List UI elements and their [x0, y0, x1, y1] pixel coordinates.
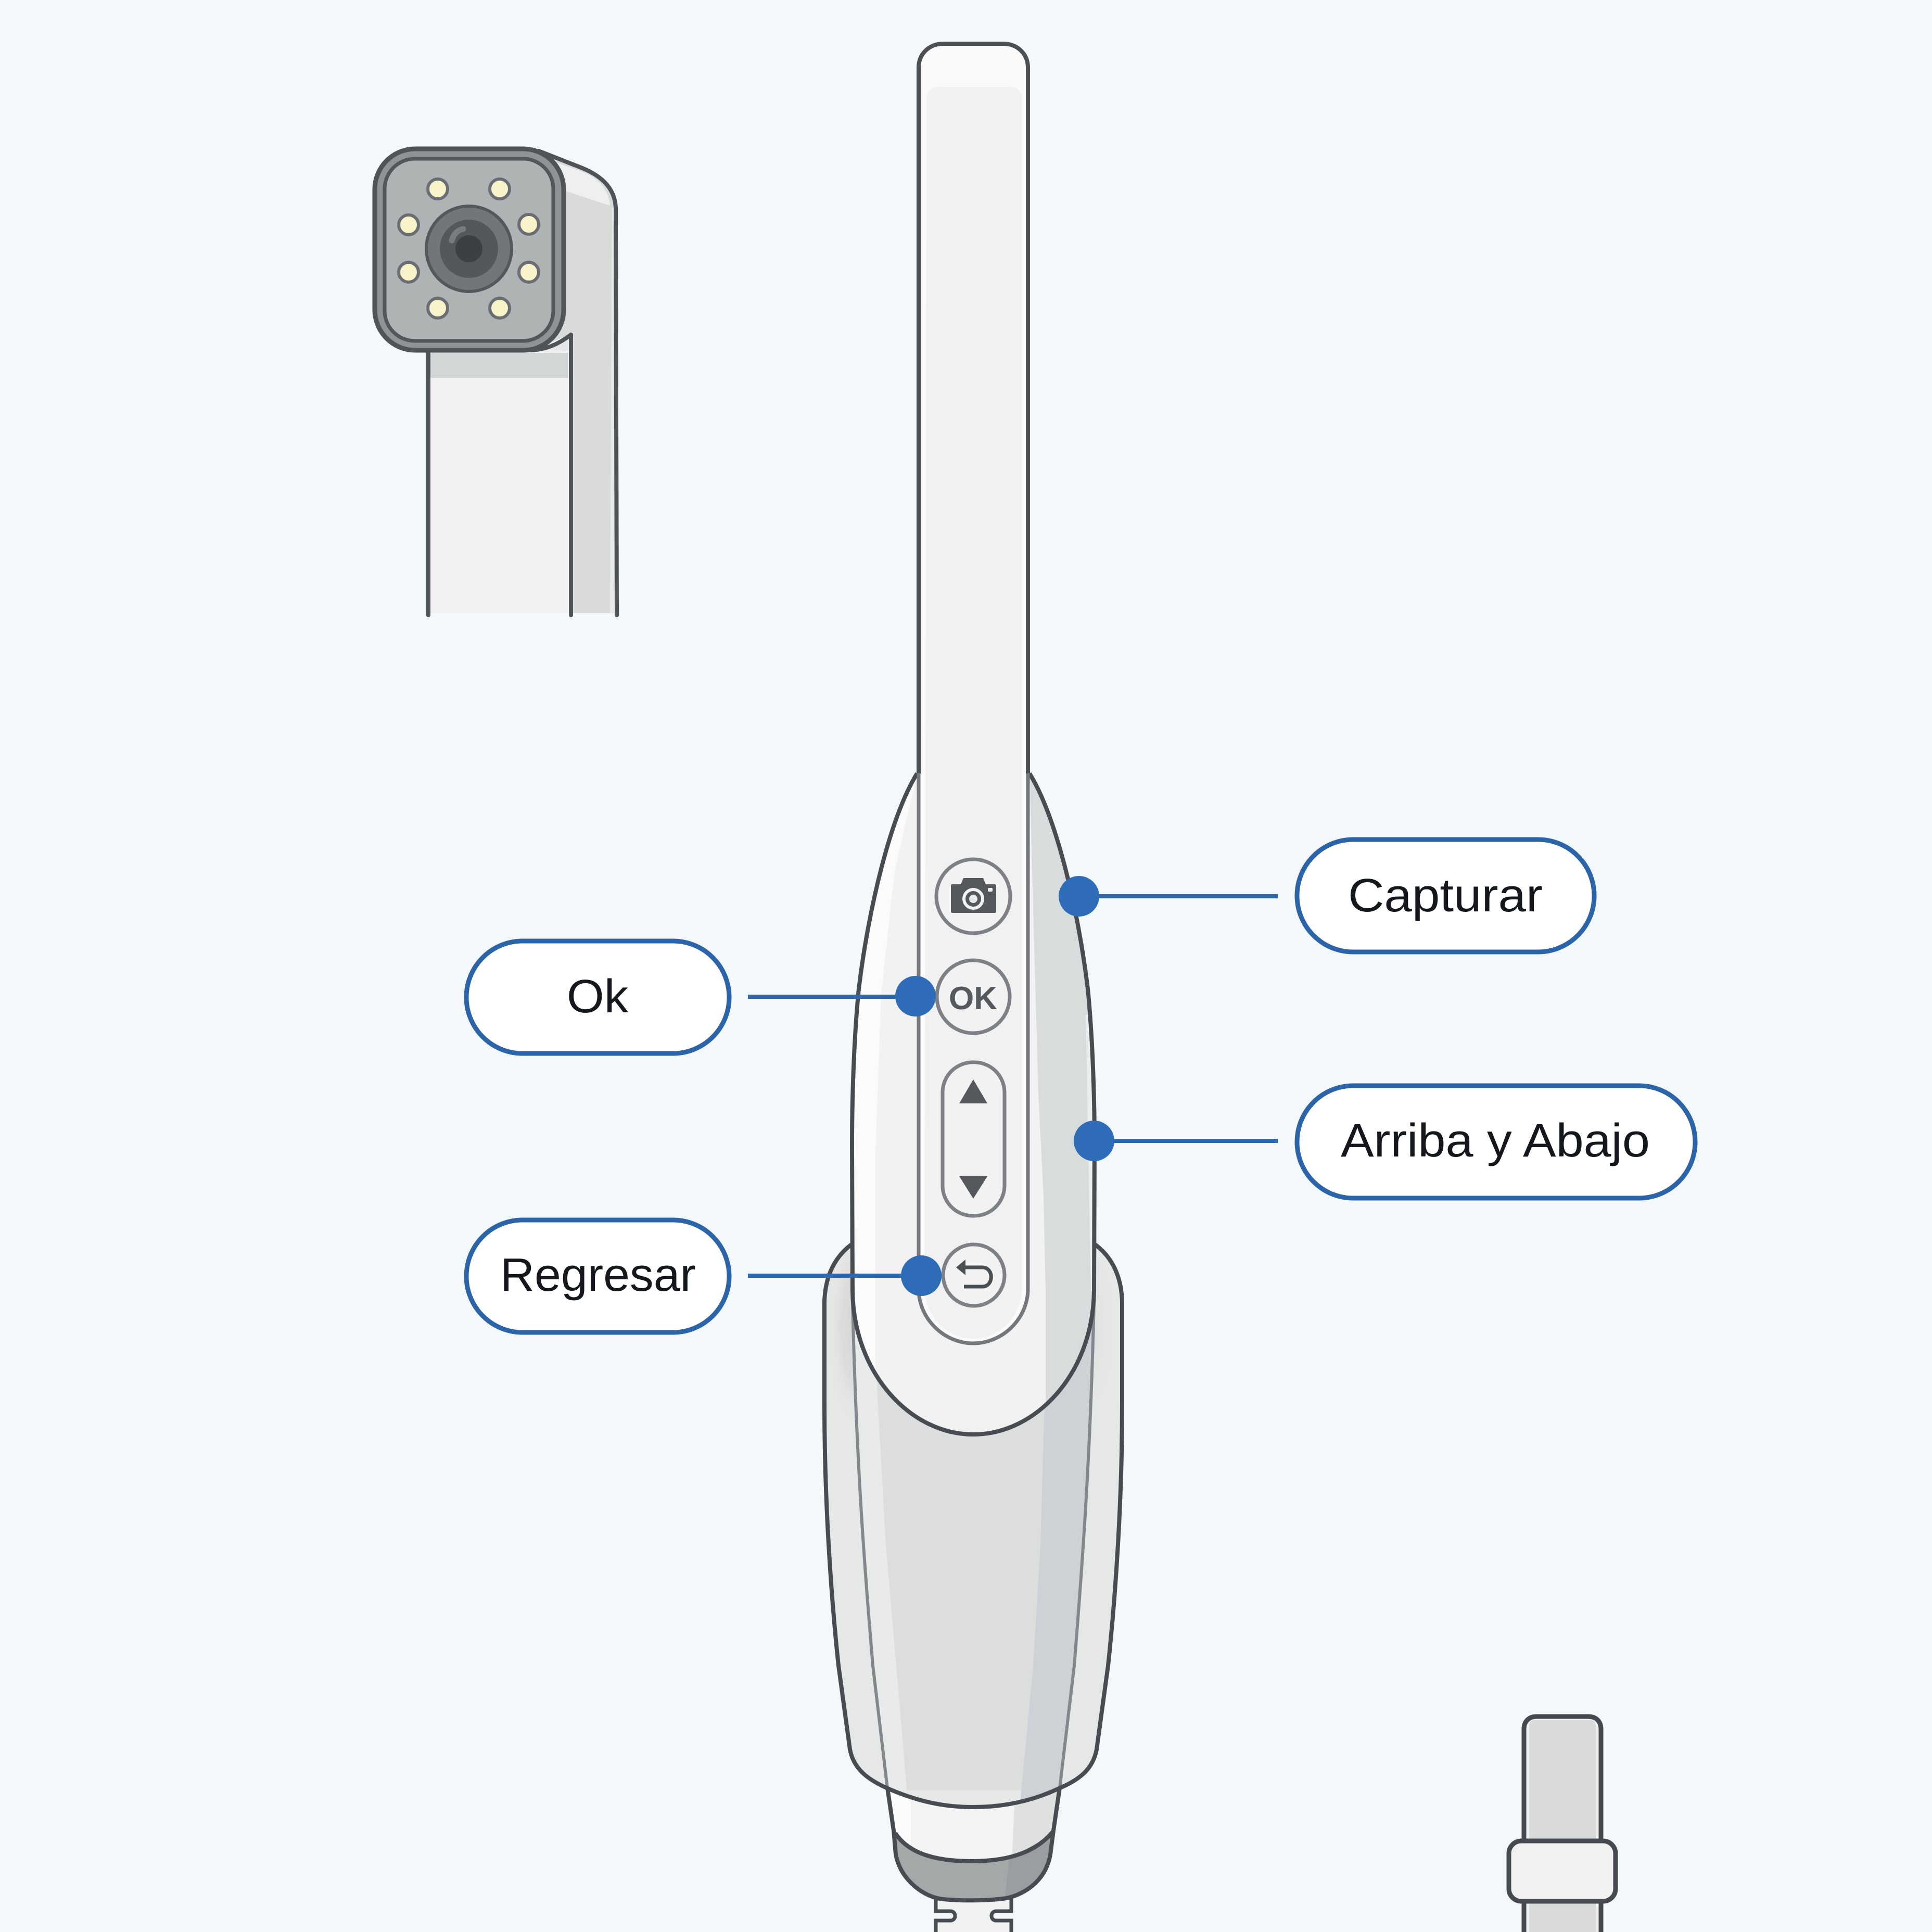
icon: back arrow	[956, 1260, 991, 1287]
callout: Ok	[466, 941, 936, 1053]
camera housing	[375, 149, 564, 350]
button: up and down	[943, 1062, 1005, 1216]
marker dot: Arriba y Abajo	[1074, 1121, 1114, 1161]
lower handle	[824, 1228, 1122, 1807]
marker dot: Regresar	[901, 1255, 942, 1296]
button: ok: OK	[949, 981, 997, 1016]
label pill: Regresar	[466, 1220, 729, 1332]
label pill: Capturar: Capturar	[1348, 870, 1543, 922]
label pill: Ok: Ok	[567, 971, 629, 1023]
camera face plate	[385, 159, 553, 341]
LED ring	[399, 179, 539, 318]
leader line: Arriba y Abajo	[1094, 1139, 1278, 1143]
neck and collar	[885, 1785, 1062, 1910]
lens	[426, 206, 512, 291]
camera arm side face	[531, 151, 617, 615]
icon: up arrow	[959, 1079, 987, 1103]
button: capture	[936, 859, 1010, 933]
cable connector	[936, 1895, 1011, 1932]
label pill: Arriba y Abajo	[1297, 1086, 1695, 1198]
cable body	[1524, 1717, 1601, 1932]
cable collar	[1509, 1841, 1616, 1901]
probe wand and control panel	[919, 44, 1028, 1343]
label pill: Regresar: Regresar	[500, 1249, 696, 1301]
label pill: Capturar	[1297, 840, 1594, 952]
callout: Capturar	[1059, 840, 1594, 952]
callout: Arriba y Abajo	[1074, 1086, 1695, 1198]
leader line: Regresar	[748, 1274, 921, 1278]
leader line: Ok	[748, 995, 916, 999]
icon: down arrow	[959, 1176, 987, 1199]
label pill: Ok	[466, 941, 729, 1053]
button: ok	[937, 960, 1010, 1033]
marker dot: Ok	[895, 976, 936, 1016]
label pill: Arriba y Abajo: Arriba y Abajo	[1341, 1115, 1650, 1167]
button: back	[943, 1244, 1005, 1306]
handle device illustration	[824, 44, 1122, 1932]
leader line: Capturar	[1079, 894, 1278, 898]
cable detail illustration	[1509, 1717, 1616, 1932]
callout: Regresar	[466, 1220, 942, 1332]
icon: camera	[951, 878, 996, 913]
marker dot: Capturar	[1059, 876, 1099, 917]
camera head illustration	[375, 149, 617, 615]
upper grip	[843, 770, 1103, 1447]
camera arm front face	[428, 335, 571, 615]
